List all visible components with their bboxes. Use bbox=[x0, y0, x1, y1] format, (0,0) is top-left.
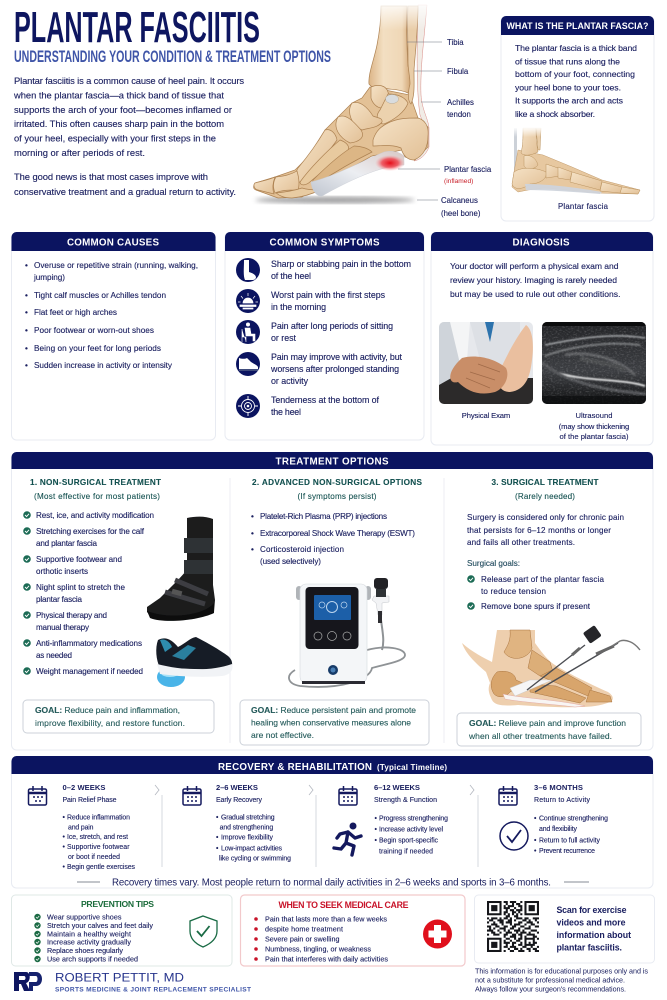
panel: common causes: Overuse or repetitive strain (running, walking, bbox=[34, 261, 198, 270]
timeline: 3-6 months: 3–6 MONTHS bbox=[534, 783, 583, 792]
column 2: advanced non-surgical options: • bbox=[251, 529, 254, 538]
image: running shoe and heel cup bbox=[156, 637, 233, 687]
icon: small foot diagram bbox=[512, 127, 640, 194]
timeline: 6-12 weeks bbox=[334, 783, 448, 856]
disclaimer: This information is for educational purposes only and is bbox=[475, 966, 648, 976]
timeline: 3-6 months: • bbox=[534, 816, 537, 822]
goal box 2: healing when conservative measures alone bbox=[251, 718, 411, 728]
anatomy labels: Fibula bbox=[447, 67, 469, 76]
timeline: 6-12 weeks: • bbox=[374, 816, 378, 822]
icon: calendar bbox=[339, 786, 357, 805]
panel: common symptoms: of the heel bbox=[271, 271, 311, 281]
panel: common symptoms: Tenderness at the bottom of bbox=[271, 395, 380, 405]
intro text: when the plantar fascia—a thick band of tissue that bbox=[13, 90, 224, 100]
intro text: morning or after periods of rest. bbox=[14, 147, 145, 158]
panel: recovery & rehabilitation: RECOVERY & REHABILITATION bbox=[218, 762, 372, 773]
metatarsal 3 bbox=[313, 146, 372, 183]
metatarsal 2 bbox=[300, 140, 349, 185]
timeline: 0-2 weeks: or boot if needed bbox=[68, 854, 120, 861]
column 2: advanced non-surgical options: Corticosteroid injection bbox=[260, 545, 344, 554]
title: PLANTAR FASCIITIS bbox=[14, 3, 260, 52]
intro text bbox=[13, 75, 244, 197]
panel: when to seek medical care: Pain that interferes with daily activities bbox=[265, 954, 388, 964]
timeline: 0-2 weeks: Supportive footwear bbox=[67, 844, 130, 851]
anatomy labels: Achilles bbox=[447, 98, 474, 107]
timeline: 2-6 weeks bbox=[183, 783, 291, 862]
timeline: 2-6 weeks: Early Recovery bbox=[216, 797, 262, 804]
panel: diagnosis: Physical Exam bbox=[462, 411, 510, 420]
panel: diagnosis bbox=[431, 232, 653, 445]
panel: common causes bbox=[12, 232, 216, 440]
subtitle: UNDERSTANDING YOUR CONDITION & TREATMENT OPTIONS bbox=[14, 47, 331, 66]
panel: when to seek medical care: Pain that lasts more than a few weeks bbox=[265, 914, 387, 924]
column 3: surgical treatment: that persists for 6–12 months or longer bbox=[467, 526, 611, 535]
image: shock wave device bbox=[289, 578, 405, 687]
timeline: 3-6 months: • bbox=[534, 848, 537, 855]
panel: what is the plantar fascia: of tissue that runs along the bbox=[515, 56, 620, 66]
intro text: conservative treatment and a gradual return to activity. bbox=[14, 186, 236, 197]
goal box 1 bbox=[23, 700, 214, 733]
panel: common symptoms: worsens after prolonged standing bbox=[270, 364, 399, 374]
panel: QR code bbox=[474, 895, 654, 963]
column 2: advanced non-surgical options: 2. ADVANCED NON-SURGICAL OPTIONS bbox=[252, 478, 423, 487]
doctor specialty: SPORTS MEDICINE & JOINT REPLACEMENT SPECIALIST bbox=[55, 986, 251, 994]
column 3: surgical treatment: 3. SURGICAL TREATMENT bbox=[492, 478, 598, 487]
column 3: surgical treatment: Surgery is considered only for chronic pain bbox=[467, 513, 624, 522]
panel: common causes: Poor footwear or worn-out shoes bbox=[34, 326, 154, 335]
anatomy labels: (heel bone) bbox=[441, 209, 481, 218]
timeline: 2-6 weeks: Gradual stretching bbox=[221, 814, 275, 822]
phalanges bbox=[274, 171, 299, 193]
panel: diagnosis: (may show thickening bbox=[559, 422, 629, 431]
panel: prevention tips: Maintain a healthy weight bbox=[47, 930, 131, 938]
panel: prevention tips: PREVENTION TIPS bbox=[81, 899, 154, 909]
timeline: 3-6 months: Return to Activity bbox=[534, 797, 590, 804]
checklist: Night splint to stretch the bbox=[36, 583, 125, 592]
column 3: surgical treatment bbox=[457, 478, 641, 746]
icon: shield bbox=[190, 916, 217, 947]
icon: check circle bbox=[500, 822, 528, 850]
timeline: 2-6 weeks: • bbox=[216, 814, 219, 822]
panel: what is the plantar fascia: Plantar fascia bbox=[558, 202, 609, 211]
checklist: orthotic inserts bbox=[36, 567, 88, 576]
panel: common symptoms: the heel bbox=[271, 407, 301, 417]
timeline: 0-2 weeks: Reduce inflammation bbox=[67, 814, 130, 822]
column 2: advanced non-surgical options: (used selectively) bbox=[260, 557, 321, 566]
timeline: 2-6 weeks: like cycling or swimming bbox=[219, 856, 291, 862]
checklist: as needed bbox=[36, 651, 72, 660]
timeline note: Recovery times vary. Most people return to normal daily activities in 2–6 weeks and sports in 3–6 months. bbox=[112, 878, 551, 888]
metatarsal 1 bbox=[295, 130, 337, 183]
panel: what is the plantar fascia: WHAT IS THE PLANTAR FASCIA? bbox=[506, 21, 648, 31]
timeline: 0-2 weeks: Ice, stretch, and rest bbox=[67, 834, 128, 841]
panel: prevention tips: Use arch supports if needed bbox=[47, 954, 138, 964]
disclaimer bbox=[475, 966, 648, 994]
goal box 2 bbox=[240, 700, 429, 745]
calcaneus bbox=[373, 118, 428, 160]
goal box 3 bbox=[457, 713, 641, 746]
panel: what is the plantar fascia bbox=[501, 16, 654, 221]
column 2: advanced non-surgical options: • bbox=[251, 512, 254, 521]
timeline: 0-2 weeks: 0–2 WEEKS bbox=[62, 783, 106, 792]
icon: shoe bbox=[236, 352, 260, 376]
panel: prevention tips: Replace shoes regularly bbox=[47, 946, 123, 955]
goal box 1: GOAL: Reduce pain and inflammation, bbox=[35, 705, 180, 715]
timeline: 0-2 weeks bbox=[28, 783, 136, 871]
column 2: advanced non-surgical options: Platelet-Rich Plasma (PRP) injections bbox=[260, 512, 387, 521]
panel: when to seek medical care: WHEN TO SEEK MEDICAL CARE bbox=[278, 900, 409, 910]
panel: diagnosis: but may be used to rule out other conditions. bbox=[450, 289, 620, 299]
image: endoscopic surgery on foot bbox=[462, 625, 640, 707]
panel: recovery & rehabilitation: (Typical Timeline) bbox=[377, 763, 447, 772]
goal box 2: GOAL: Reduce persistent pain and promote bbox=[251, 705, 416, 715]
photo: ultrasound bbox=[542, 322, 646, 404]
panel: QR code: Scan for exercise bbox=[556, 905, 627, 915]
anatomy labels: tendon bbox=[447, 110, 471, 119]
timeline: 6-12 weeks: 6–12 WEEKS bbox=[374, 783, 420, 792]
disclaimer: Always follow your surgeon's recommendations. bbox=[475, 984, 626, 994]
panel: QR code: information about bbox=[556, 930, 631, 940]
checklist: plantar fascia bbox=[36, 595, 82, 604]
panel: common symptoms: in the morning bbox=[271, 302, 326, 312]
timeline: 3-6 months: Return to full activity bbox=[539, 838, 601, 844]
timeline: 0-2 weeks: • bbox=[62, 864, 66, 871]
checklist: Rest, ice, and activity modification bbox=[36, 511, 154, 520]
talus bbox=[371, 85, 389, 108]
panel: diagnosis: DIAGNOSIS bbox=[512, 238, 570, 248]
timeline: 0-2 weeks: • bbox=[62, 814, 66, 822]
panel: diagnosis: of the plantar fascia) bbox=[560, 432, 629, 441]
panel: prevention tips bbox=[12, 895, 232, 966]
panel: prevention tips: Wear supportive shoes bbox=[47, 912, 122, 922]
checklist: Supportive footwear and bbox=[36, 555, 122, 564]
checklist: manual therapy bbox=[36, 623, 90, 632]
anatomy illustration: foot skeleton bbox=[254, 0, 432, 204]
panel: common symptoms: or rest bbox=[271, 333, 297, 343]
column 2: advanced non-surgical options bbox=[240, 478, 429, 745]
panel: prevention tips: Stretch your calves and feet daily bbox=[47, 921, 153, 930]
anatomy labels: Calcaneus bbox=[441, 196, 478, 205]
timeline: 6-12 weeks: Begin sport-specific bbox=[379, 838, 439, 844]
timeline: 0-2 weeks: Pain Relief Phase bbox=[62, 797, 117, 804]
timeline: 2-6 weeks: 2–6 WEEKS bbox=[216, 783, 258, 792]
checklist: and plantar fascia bbox=[36, 539, 97, 548]
panel: when to seek medical care: Severe pain or swelling bbox=[265, 934, 340, 944]
panel: what is the plantar fascia: The plantar fascia is a thick band bbox=[515, 43, 637, 53]
timeline: 6-12 weeks: Progress strengthening bbox=[379, 816, 448, 822]
QR code bbox=[487, 902, 539, 951]
goal box 3: when all other treatments have failed. bbox=[468, 731, 612, 741]
panel: when to seek medical care: despite home treatment bbox=[265, 924, 343, 934]
panel: when to seek medical care bbox=[240, 895, 465, 966]
timeline: 6-12 weeks: training if needed bbox=[379, 848, 433, 856]
panel: common causes: Flat feet or high arches bbox=[34, 308, 117, 317]
fibula bbox=[408, 6, 418, 104]
panel: QR code: plantar fasciitis. bbox=[556, 942, 622, 952]
image: walking boot bbox=[147, 517, 215, 621]
checklist: Anti-inflammatory medications bbox=[36, 639, 142, 648]
panel: common causes: • bbox=[25, 291, 28, 300]
timeline: 2-6 weeks: Improve flexibility bbox=[221, 834, 274, 842]
panel: QR code: videos and more bbox=[556, 918, 626, 928]
timeline: 0-2 weeks: Begin gentle exercises bbox=[67, 864, 136, 871]
photo: physical exam bbox=[439, 322, 533, 404]
timeline: 3-6 months: • bbox=[534, 838, 537, 844]
foot silhouette bbox=[254, 87, 428, 198]
panel: treatment options: TREATMENT OPTIONS bbox=[276, 456, 389, 468]
goal box 1: improve flexibility, and restore function. bbox=[35, 718, 185, 728]
checklist: Stretching exercises for the calf bbox=[36, 527, 145, 536]
timeline: 3-6 months: and flexibility bbox=[539, 826, 578, 833]
timeline: 6-12 weeks: Increase activity level bbox=[379, 826, 443, 834]
panel: common symptoms bbox=[225, 232, 424, 440]
checklist: Physical therapy and bbox=[36, 611, 107, 620]
plantar fascia band bbox=[311, 151, 404, 196]
navicular bbox=[350, 102, 382, 130]
timeline: 2-6 weeks: and strengthening bbox=[220, 824, 273, 832]
column 3: surgical treatment: to reduce tension bbox=[481, 587, 546, 596]
column 2: advanced non-surgical options: Extracorporeal Shock Wave Therapy (ESWT) bbox=[260, 529, 415, 538]
intro text: supports the arch of your foot—becomes inflamed or bbox=[14, 104, 232, 115]
panel: common causes: Sudden increase in activity or intensity bbox=[34, 361, 173, 370]
panel: common causes: • bbox=[25, 326, 28, 335]
timeline: 2-6 weeks: • bbox=[216, 834, 219, 842]
icon: sitting person bbox=[236, 320, 260, 344]
checklist bbox=[23, 511, 154, 676]
anatomy labels bbox=[398, 38, 492, 218]
icon: sunrise bbox=[236, 289, 260, 313]
panel: common symptoms: COMMON SYMPTOMS bbox=[270, 238, 380, 248]
intro text: of your heel, especially with your first steps in the bbox=[14, 132, 216, 144]
doctor name: ROBERT PETTIT, MD bbox=[55, 970, 184, 984]
intro text: The good news is that most cases improve with bbox=[14, 171, 208, 182]
column 1: non-surgical treatment: 1. NON-SURGICAL TREATMENT bbox=[30, 478, 161, 487]
column 2: advanced non-surgical options: (If symptoms persist) bbox=[298, 492, 377, 501]
logo: RP monogram bbox=[14, 972, 42, 991]
icon: calendar bbox=[499, 786, 517, 805]
timeline: 6-12 weeks: Strength & Function bbox=[374, 797, 437, 804]
timeline: 0-2 weeks: • bbox=[62, 844, 66, 851]
anatomy labels: Tibia bbox=[447, 38, 464, 47]
panel: diagnosis: Your doctor will perform a physical exam and bbox=[450, 261, 619, 271]
column 3: surgical treatment: Surgical goals: bbox=[467, 559, 520, 568]
anatomy labels: (inflamed) bbox=[444, 178, 473, 185]
talus body bbox=[377, 94, 408, 124]
panel: what is the plantar fascia: It supports the arch and acts bbox=[515, 96, 624, 106]
panel: common symptoms: Sharp or stabbing pain in the bottom bbox=[271, 259, 411, 269]
panel: common symptoms: or activity bbox=[271, 376, 309, 386]
disclaimer: not a substitute for professional medical advice. bbox=[475, 976, 625, 984]
checklist: Weight management if needed bbox=[36, 667, 143, 676]
panel: recovery & rehabilitation bbox=[12, 756, 653, 888]
cuboid bbox=[336, 116, 363, 143]
panel: common symptoms: Worst pain with the first steps bbox=[271, 290, 386, 300]
panel: common causes: • bbox=[25, 308, 28, 317]
panel: common causes: Being on your feet for long periods bbox=[34, 344, 161, 353]
intro text: Plantar fasciitis is a common cause of heel pain. It occurs bbox=[14, 75, 244, 86]
panel: what is the plantar fascia: bottom of your foot, connecting bbox=[515, 69, 635, 79]
panel: common causes: COMMON CAUSES bbox=[67, 238, 159, 248]
panel: diagnosis: review your history. Imaging is rarely needed bbox=[450, 275, 617, 285]
icon: medical cross bbox=[423, 920, 452, 948]
goal box 3: GOAL: Relieve pain and improve function bbox=[469, 718, 626, 728]
panel: common causes: • bbox=[25, 344, 28, 353]
icon: target bbox=[236, 394, 260, 418]
timeline: 2-6 weeks: Low-impact activities bbox=[221, 846, 283, 852]
timeline: 0-2 weeks: • bbox=[62, 834, 66, 841]
timeline: 3-6 months: Continue strengthening bbox=[539, 816, 608, 822]
panel: common causes: Tight calf muscles or Achilles tendon bbox=[34, 291, 166, 300]
icon: calendar bbox=[183, 786, 201, 805]
timeline: 3-6 months bbox=[499, 783, 608, 855]
icon: heel bbox=[236, 258, 260, 282]
goal box 2: are not effective. bbox=[251, 730, 314, 740]
panel: treatment options bbox=[12, 452, 653, 750]
timeline: 2-6 weeks: • bbox=[216, 846, 219, 852]
panel: what is the plantar fascia: your heel bone to your toes. bbox=[515, 82, 621, 92]
icon: runner bbox=[334, 822, 361, 855]
achilles tendon bbox=[414, 5, 429, 161]
panel: common causes: jumping) bbox=[33, 273, 65, 282]
intro text: irritated. This often causes sharp pain in the bottom bbox=[14, 118, 224, 129]
panel: common causes: • bbox=[25, 261, 28, 270]
panel: when to seek medical care: Numbness, tingling, or weakness bbox=[265, 944, 371, 954]
column 3: surgical treatment: Remove bone spurs if present bbox=[481, 602, 591, 611]
anatomy labels: Plantar fascia bbox=[444, 165, 492, 174]
panel: common symptoms: Pain after long periods of sitting bbox=[271, 321, 393, 331]
column 3: surgical treatment: and fails all other treatments. bbox=[467, 538, 575, 547]
panel: prevention tips: Increase activity gradually bbox=[47, 938, 131, 946]
timeline: 6-12 weeks: • bbox=[374, 826, 378, 834]
panel: what is the plantar fascia: like a shock absorber. bbox=[515, 109, 595, 119]
column 1: non-surgical treatment: (Most effective for most patients) bbox=[34, 492, 160, 501]
icon: calendar bbox=[28, 786, 46, 805]
panel: diagnosis: Ultrasound bbox=[576, 411, 612, 420]
timeline: 6-12 weeks: • bbox=[374, 838, 378, 844]
column 2: advanced non-surgical options: • bbox=[251, 545, 254, 554]
column 3: surgical treatment: Release part of the plantar fascia bbox=[481, 575, 604, 584]
column 3: surgical treatment: (Rarely needed) bbox=[515, 492, 575, 501]
column 1: non-surgical treatment bbox=[23, 478, 233, 733]
panel: common causes: • bbox=[25, 361, 28, 370]
timeline: 0-2 weeks: and pain bbox=[68, 824, 94, 832]
panel: common symptoms: Pain may improve with activity, but bbox=[271, 352, 403, 362]
timeline: 3-6 months: Prevent recurrence bbox=[539, 848, 595, 855]
tibia bbox=[369, 6, 410, 93]
